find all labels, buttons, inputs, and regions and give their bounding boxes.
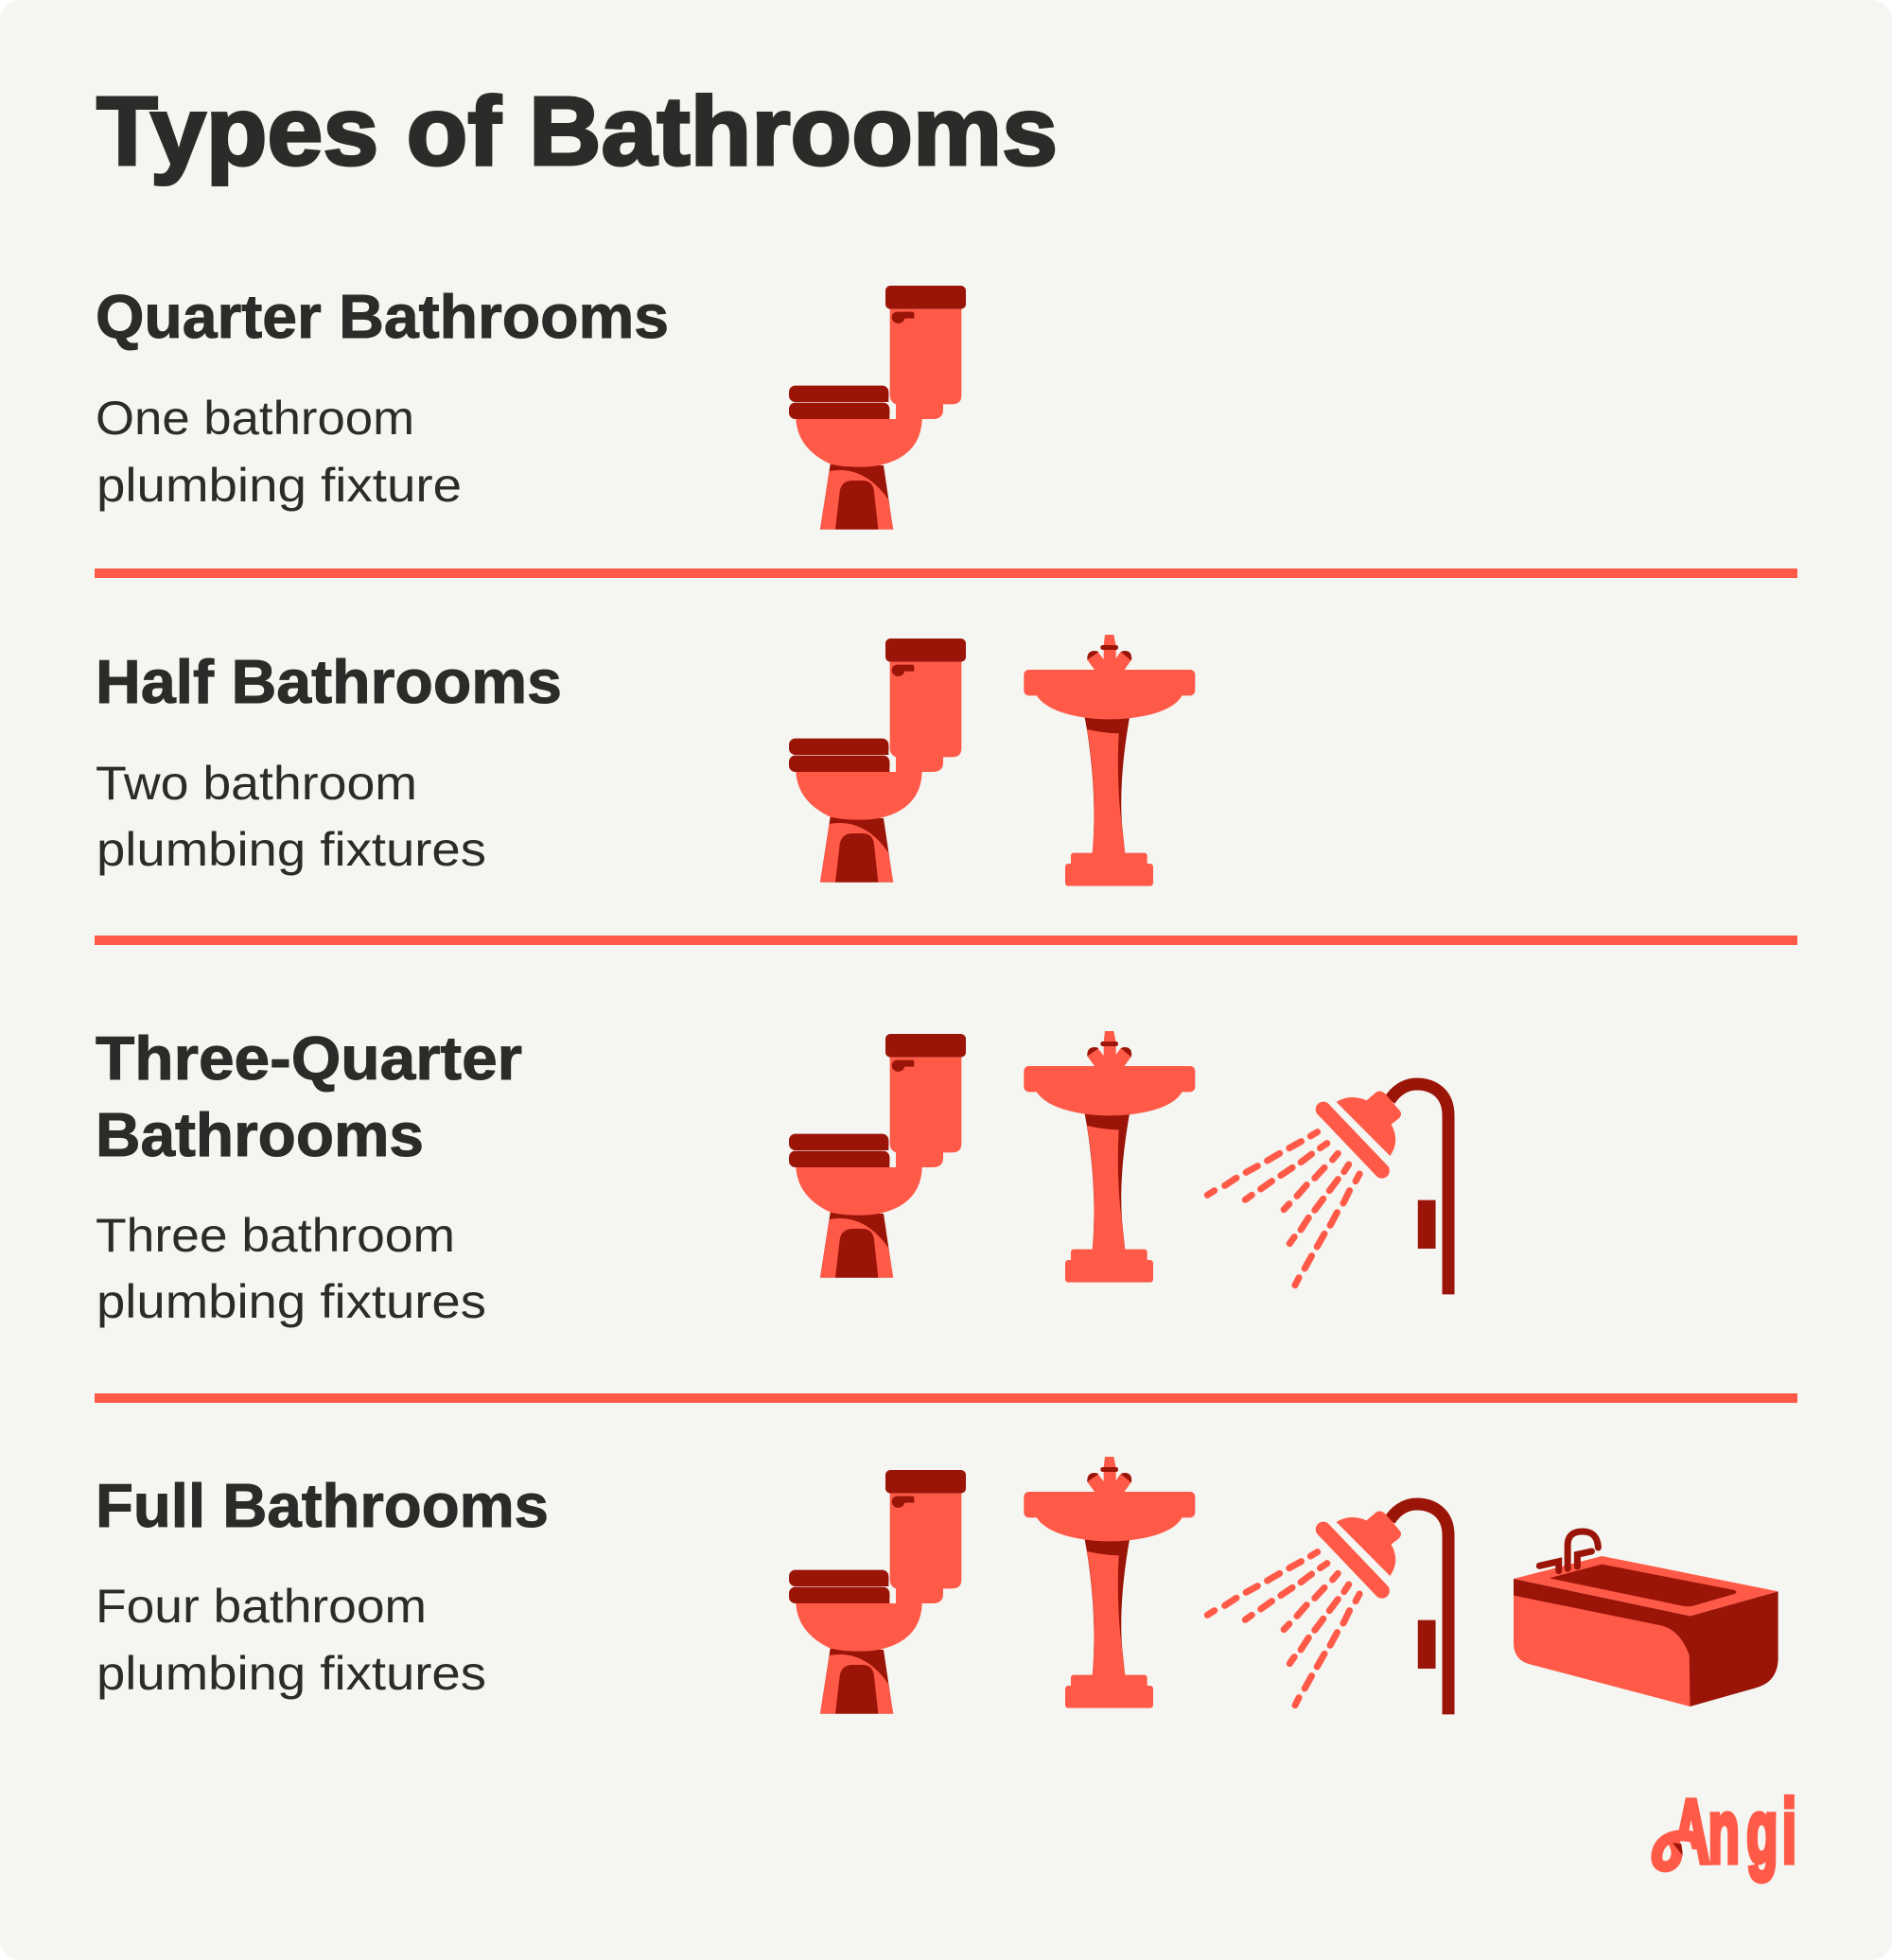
logo: Angi: Angi [1673, 1782, 1796, 1881]
heading: full bathrooms: Full Bathrooms [96, 1471, 549, 1540]
heading: quarter bathrooms: Quarter Bathrooms [96, 282, 669, 351]
text block: half description: plumbing fixtures [96, 823, 486, 876]
icon: toilet [789, 1034, 966, 1278]
divider [95, 936, 1797, 945]
text block: three-quarter description [96, 1209, 486, 1328]
heading: three-quarter bathrooms [96, 1024, 522, 1169]
text block: quarter description: plumbing fixture [96, 459, 462, 512]
heading: three-quarter bathrooms: Three-Quarter [96, 1024, 522, 1093]
title: Types of Bathrooms [96, 77, 1058, 185]
panel: full bathrooms [96, 1457, 1778, 1714]
text block: half description: Two bathroom [96, 757, 417, 810]
icon: sink [1024, 1457, 1195, 1708]
icon: toilet [789, 1470, 966, 1714]
text block: quarter description: One bathroom [96, 392, 414, 445]
panel: quarter bathrooms [96, 282, 966, 530]
text block: three-quarter description: plumbing fixtures [96, 1275, 486, 1328]
divider [95, 1393, 1797, 1403]
text block: quarter description [96, 392, 462, 512]
panel: half bathrooms [96, 635, 1195, 886]
icon: sink [1024, 1031, 1195, 1283]
icon: bathtub [1514, 1531, 1778, 1706]
text block: full description: Four bathroom [96, 1580, 427, 1633]
icon: sink [1024, 635, 1195, 886]
panel: three-quarter bathrooms [96, 1024, 1448, 1328]
heading: three-quarter bathrooms: Bathrooms [96, 1100, 424, 1169]
heading: half bathrooms: Half Bathrooms [96, 647, 562, 716]
text block: full description [96, 1580, 486, 1700]
icon: toilet [789, 639, 966, 883]
icon: shower [1207, 1084, 1448, 1294]
divider [95, 569, 1797, 578]
icon: toilet [789, 286, 966, 530]
text block: full description: plumbing fixtures [96, 1647, 486, 1700]
icon: shower [1207, 1504, 1448, 1714]
text block: three-quarter description: Three bathroom [96, 1209, 455, 1262]
text block: half description [96, 757, 486, 876]
